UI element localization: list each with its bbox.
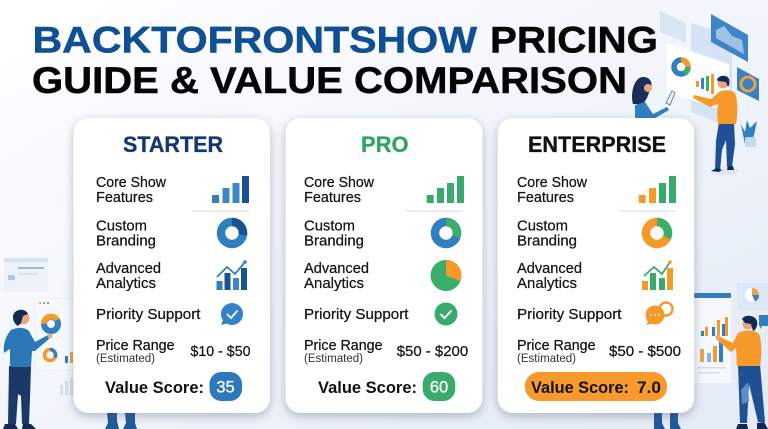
icon: enterprise donut xyxy=(646,222,668,244)
feature: custom branding xyxy=(517,218,577,250)
feature: core show features: Core Show xyxy=(304,175,375,191)
illustration: bottom left man with charts xyxy=(3,258,137,429)
feature: advanced analytics: Analytics xyxy=(304,276,364,292)
feature: custom branding: Custom xyxy=(96,218,147,234)
value score: 35 xyxy=(216,378,235,396)
icon: starter donut xyxy=(221,222,243,244)
feature: core show features: Features xyxy=(96,190,153,206)
value score xyxy=(525,372,667,401)
feature: priority support: Priority Support xyxy=(304,307,408,323)
feature: custom branding: Custom xyxy=(517,218,568,234)
value score: Value Score: xyxy=(105,379,204,397)
icon: starter analytics xyxy=(216,260,247,290)
feature: core show features: Features xyxy=(304,190,361,206)
feature: custom branding: Branding xyxy=(517,234,577,250)
panel: enterprise xyxy=(498,118,694,413)
price value: $10 - $50 xyxy=(190,343,250,360)
icon: starter bars xyxy=(212,176,249,203)
title xyxy=(32,20,658,101)
price range label xyxy=(304,338,382,365)
price range label: Price Range xyxy=(304,338,382,354)
title: GUIDE & VALUE COMPARISON xyxy=(32,60,627,101)
feature: core show features: Core Show xyxy=(96,175,167,191)
icon: starter support bubble xyxy=(221,303,243,325)
icon: enterprise chat bubbles xyxy=(646,302,672,325)
price value: $50 - $500 xyxy=(609,343,681,360)
feature: advanced analytics xyxy=(304,261,369,292)
feature: custom branding xyxy=(96,218,156,250)
price range label xyxy=(517,338,596,365)
feature: core show features xyxy=(517,175,588,206)
feature: custom branding: Custom xyxy=(304,218,355,234)
price range label: (Estimated) xyxy=(304,353,363,365)
feature: advanced analytics: Advanced xyxy=(517,261,582,277)
feature: advanced analytics xyxy=(517,261,582,292)
value score: 60 xyxy=(430,378,448,396)
feature: core show features xyxy=(96,175,167,206)
price value: $50 - $200 xyxy=(397,343,468,360)
panel: pro xyxy=(286,118,482,413)
price range label: (Estimated) xyxy=(517,353,576,365)
feature: priority support: Priority Support xyxy=(517,307,622,323)
heading: pro: PRO xyxy=(361,132,408,157)
feature: custom branding: Branding xyxy=(304,234,364,250)
icon: enterprise bars xyxy=(639,176,676,203)
heading: enterprise: ENTERPRISE xyxy=(528,132,666,157)
value score: Value Score: xyxy=(318,379,417,397)
panel: starter xyxy=(74,118,270,413)
price range label: Price Range xyxy=(96,338,174,354)
value score: Value Score: xyxy=(531,379,629,397)
price range label: Price Range xyxy=(517,338,596,354)
feature: priority support: Priority Support xyxy=(96,307,200,323)
feature: advanced analytics: Analytics xyxy=(96,276,156,292)
icon: pro bars xyxy=(427,176,464,203)
title: PRICING xyxy=(490,20,658,60)
icon: pro donut xyxy=(435,222,457,244)
illustration: bottom right man with charts xyxy=(654,283,768,429)
illustration: top right people with dashboards xyxy=(632,11,759,175)
feature: advanced analytics: Advanced xyxy=(304,261,369,277)
value score xyxy=(105,372,242,401)
price range label xyxy=(96,338,174,365)
feature: custom branding: Branding xyxy=(96,234,156,250)
feature: custom branding xyxy=(304,218,364,250)
icon: pro pie xyxy=(430,260,462,291)
feature: advanced analytics xyxy=(96,261,161,292)
value score: 7.0 xyxy=(637,379,661,397)
price range label: (Estimated) xyxy=(96,353,155,365)
icon: enterprise analytics xyxy=(642,260,673,290)
feature: core show features xyxy=(304,175,375,206)
feature: core show features: Core Show xyxy=(517,175,588,191)
value score xyxy=(318,372,455,401)
feature: advanced analytics: Advanced xyxy=(96,261,161,277)
heading: starter: STARTER xyxy=(123,132,223,157)
icon: pro check xyxy=(434,302,458,326)
title: BACKTOFRONTSHOW xyxy=(32,20,477,60)
feature: advanced analytics: Analytics xyxy=(517,276,577,292)
feature: core show features: Features xyxy=(517,190,574,206)
